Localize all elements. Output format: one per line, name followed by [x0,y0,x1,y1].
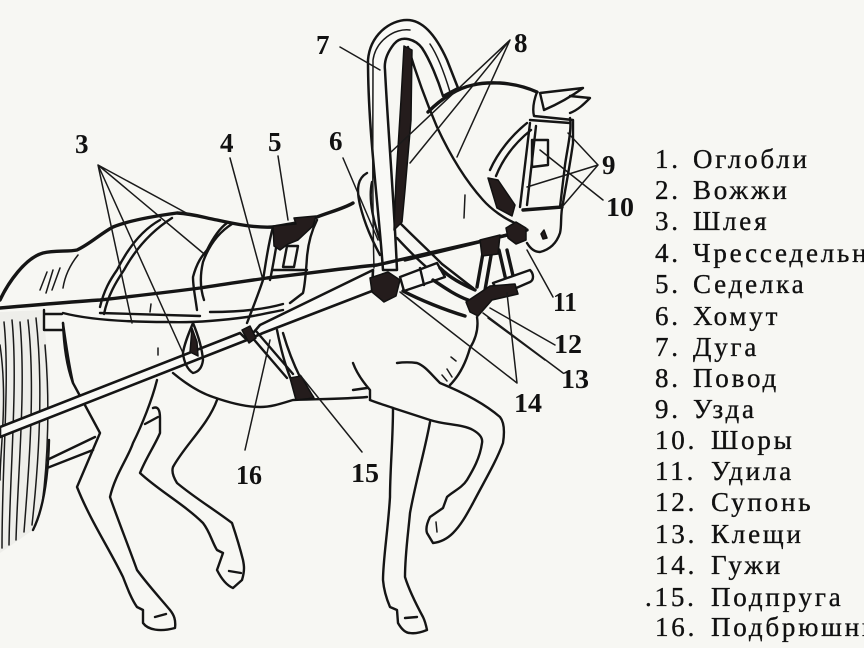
diagram numbers: 8 [514,28,528,58]
legend item 3: Шлея [693,206,769,236]
legend item 8: Повод [693,363,779,393]
belly band: 16 Подбрюшник [242,326,293,378]
diagram numbers: 4 [220,128,234,158]
shafts: 1 Оглобли [0,270,373,437]
legend item 7: Дуга [693,332,759,362]
legend item 7: 7. [655,332,681,362]
bridle: 9 Узда and 10 blinkers [488,118,570,216]
belly crease [353,363,370,400]
diagram numbers: 16 [236,460,262,490]
legend item 6: 6. [655,301,681,331]
diagram numbers: 14 [514,388,542,418]
legend item 12: Супонь [711,487,813,517]
legend item 13: 13. [655,519,697,549]
diagram numbers: 11 [553,287,577,317]
legend item 9: Узда [693,394,757,424]
traces and tube: 14 Гужи [400,263,533,316]
diagram numbers: 13 [561,364,589,394]
leader lines [98,40,603,452]
tail [0,310,62,553]
saddle: 5 Седелка [247,216,317,323]
legend item 10: Шоры [711,425,795,455]
back-strap: 3 Шлея [63,218,283,373]
legend item 14: Гужи [711,550,783,580]
diagram numbers: 3 [75,129,88,159]
arch: 7 Дуга [368,20,458,270]
far hind leg [140,400,244,588]
legend item 3: 3. [655,206,681,236]
legend item 5: Седелка [693,269,806,299]
legend item 2: 2. [655,175,681,205]
diagram numbers: 10 [606,192,634,222]
legend item 1: 1. [655,144,681,174]
junction of collar and shaft [370,272,400,302]
draw strap on arch [394,46,412,230]
diagram numbers: 5 [268,127,282,157]
legend item 14: 14. [655,550,697,580]
legend item 15: .15. [645,582,697,612]
legend item 1: Оглобли [693,144,810,174]
diagram numbers: 15 [351,458,379,488]
diagram numbers: 6 [329,126,342,156]
neck straps [477,235,514,290]
legend item 11: 11. [655,456,696,486]
standing foreleg [383,408,430,633]
diagram numbers [75,28,634,490]
legend item 16: 16. [655,612,697,642]
legend item 13: Клещи [711,519,804,549]
chest line [442,317,478,385]
diagram numbers: 7 [316,30,330,60]
diagram numbers: 12 [554,329,582,359]
legend item 11: Удила [711,456,794,486]
reins: 2 Вожжи [0,230,527,308]
legend item 10: 10. [655,425,697,455]
legend item 9: 9. [655,394,681,424]
legend item 6: Хомут [693,301,780,331]
legend item 12: 12. [655,487,697,517]
girth: 15 Подпруга [277,330,314,400]
neck and head [408,47,590,252]
bit: 11 Удила [506,222,526,244]
legend [645,144,864,642]
cross bar behind the leg [47,437,95,468]
horse body outline [0,203,367,407]
legend item 8: 8. [655,363,681,393]
legend item 15: Подпруга [711,582,844,612]
near hind leg [63,323,175,630]
legend item 5: 5. [655,269,681,299]
legend item 2: Вожжи [693,175,790,205]
collar: 6 Хомут [358,173,473,288]
raised foreleg [370,362,504,543]
diagram numbers: 9 [602,150,616,180]
legend item 4: 4. [655,238,681,268]
